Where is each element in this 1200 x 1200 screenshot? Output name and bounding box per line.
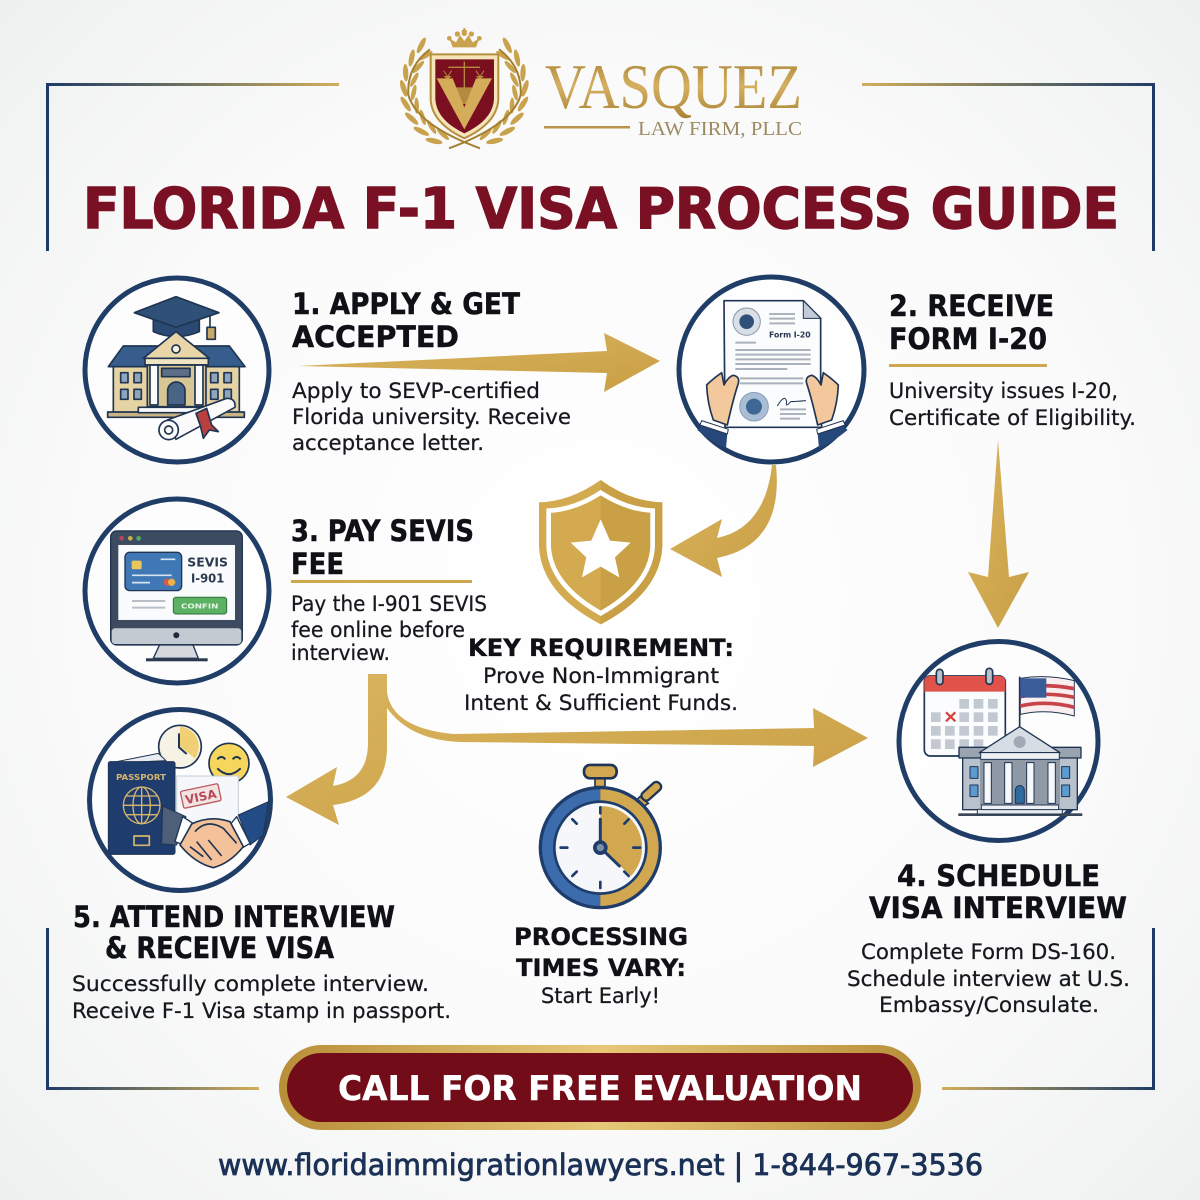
logo wordmark: VASQUEZ <box>545 51 802 122</box>
step 3 heading <box>291 514 474 583</box>
step 4 description: Complete Form DS-160. <box>861 940 1116 965</box>
step 1 icon: university and diploma <box>85 278 269 462</box>
step 5 text <box>72 900 451 1024</box>
processing times callout: PROCESSING <box>514 923 688 951</box>
step 3 description: Pay the I-901 SEVIS <box>291 592 487 617</box>
step 1 description: Apply to SEVP-certified <box>292 379 540 404</box>
step 2 text <box>889 289 1136 431</box>
call to action button <box>283 1049 917 1126</box>
step 2 icon: form I-20 held in hands: Form I-20 <box>769 330 811 340</box>
step 1 heading: ACCEPTED <box>292 320 459 354</box>
step 3 heading: 3. PAY SEVIS <box>291 514 474 548</box>
step 4 description: Embassy/Consulate. <box>879 993 1099 1018</box>
step 1 heading: 1. APPLY & GET <box>292 287 520 321</box>
step 4 text <box>847 859 1130 1018</box>
step 4 heading: 4. SCHEDULE <box>897 859 1100 893</box>
step 2 description: Certificate of Eligibility. <box>889 406 1136 431</box>
arrow: step 1 to step 2 <box>298 333 660 392</box>
step 3 icon: SEVIS payment on monitor: CONFIN <box>181 601 218 610</box>
step 5 icon: passport, visa and handshake: PASSPORT <box>116 772 166 782</box>
step 2 description <box>889 379 1136 431</box>
processing times callout: TIMES VARY: <box>516 954 686 982</box>
step 3 text <box>291 514 487 666</box>
step 2 heading: FORM I-20 <box>889 322 1047 356</box>
step 3 icon: SEVIS payment on monitor: SEVIS <box>187 556 228 570</box>
step 5 icon: passport, visa and handshake <box>90 710 270 890</box>
step 5 description: Receive F-1 Visa stamp in passport. <box>72 999 451 1024</box>
step 3 description <box>291 592 487 666</box>
step 1 heading <box>292 287 520 354</box>
step 4 icon: calendar, flag and embassy <box>899 642 1098 840</box>
key requirement callout: Intent & Sufficient Funds. <box>464 691 738 716</box>
key requirement callout <box>464 634 738 716</box>
arrow: step 2 to step 4 <box>968 440 1029 628</box>
step 5 description: Successfully complete interview. <box>72 972 429 997</box>
step 4 description <box>847 940 1130 1018</box>
step 1 text <box>292 287 571 456</box>
step 3 icon: SEVIS payment on monitor <box>85 499 269 683</box>
key requirement callout: KEY REQUIREMENT: <box>468 634 734 662</box>
step 1 description: Florida university. Receive <box>292 405 571 430</box>
step 5 heading: & RECEIVE VISA <box>105 931 334 965</box>
logo tagline: LAW FIRM, PLLC <box>638 118 802 140</box>
arrow: form I-20 to key requirement <box>670 465 777 577</box>
logo: Vasquez Law Firm <box>398 28 802 148</box>
icon: stopwatch <box>539 765 663 909</box>
step 2 icon: form I-20 held in hands <box>679 277 864 462</box>
step 4 heading <box>869 859 1127 925</box>
step 4 heading: VISA INTERVIEW <box>869 891 1127 925</box>
processing times callout <box>514 923 688 1009</box>
step 5 heading <box>73 900 395 965</box>
step 3 icon: SEVIS payment on monitor: I-901 <box>191 572 224 586</box>
step 5 description <box>72 972 451 1024</box>
logo tagline rule <box>544 126 630 128</box>
step 1 description <box>292 379 571 456</box>
step 2 heading <box>889 289 1054 367</box>
step 2 description: University issues I-20, <box>889 379 1118 404</box>
decorative frame <box>46 83 1155 1090</box>
step 3 description: interview. <box>291 641 390 666</box>
contact line: www.floridaimmigrationlawyers.net | 1-844-967-3536 <box>218 1148 983 1182</box>
step 2 heading: 2. RECEIVE <box>889 289 1054 323</box>
call to action button: CALL FOR FREE EVALUATION <box>338 1069 862 1109</box>
step 5 icon: passport, visa and handshake: VISA <box>184 787 219 807</box>
step 3 heading: FEE <box>291 547 344 581</box>
step 3 description: fee online before <box>291 618 465 643</box>
arrow: step 3 to steps 4 and 5 <box>286 674 868 825</box>
key requirement callout: Prove Non-Immigrant <box>483 664 719 689</box>
logo emblem <box>398 28 530 148</box>
step 5 heading: 5. ATTEND INTERVIEW <box>73 900 395 934</box>
step 1 description: acceptance letter. <box>292 431 484 456</box>
icon: gold shield with star <box>539 480 662 624</box>
step 4 description: Schedule interview at U.S. <box>847 967 1130 992</box>
title: FLORIDA F-1 VISA PROCESS GUIDE <box>83 177 1119 242</box>
processing times callout: Start Early! <box>541 984 660 1009</box>
